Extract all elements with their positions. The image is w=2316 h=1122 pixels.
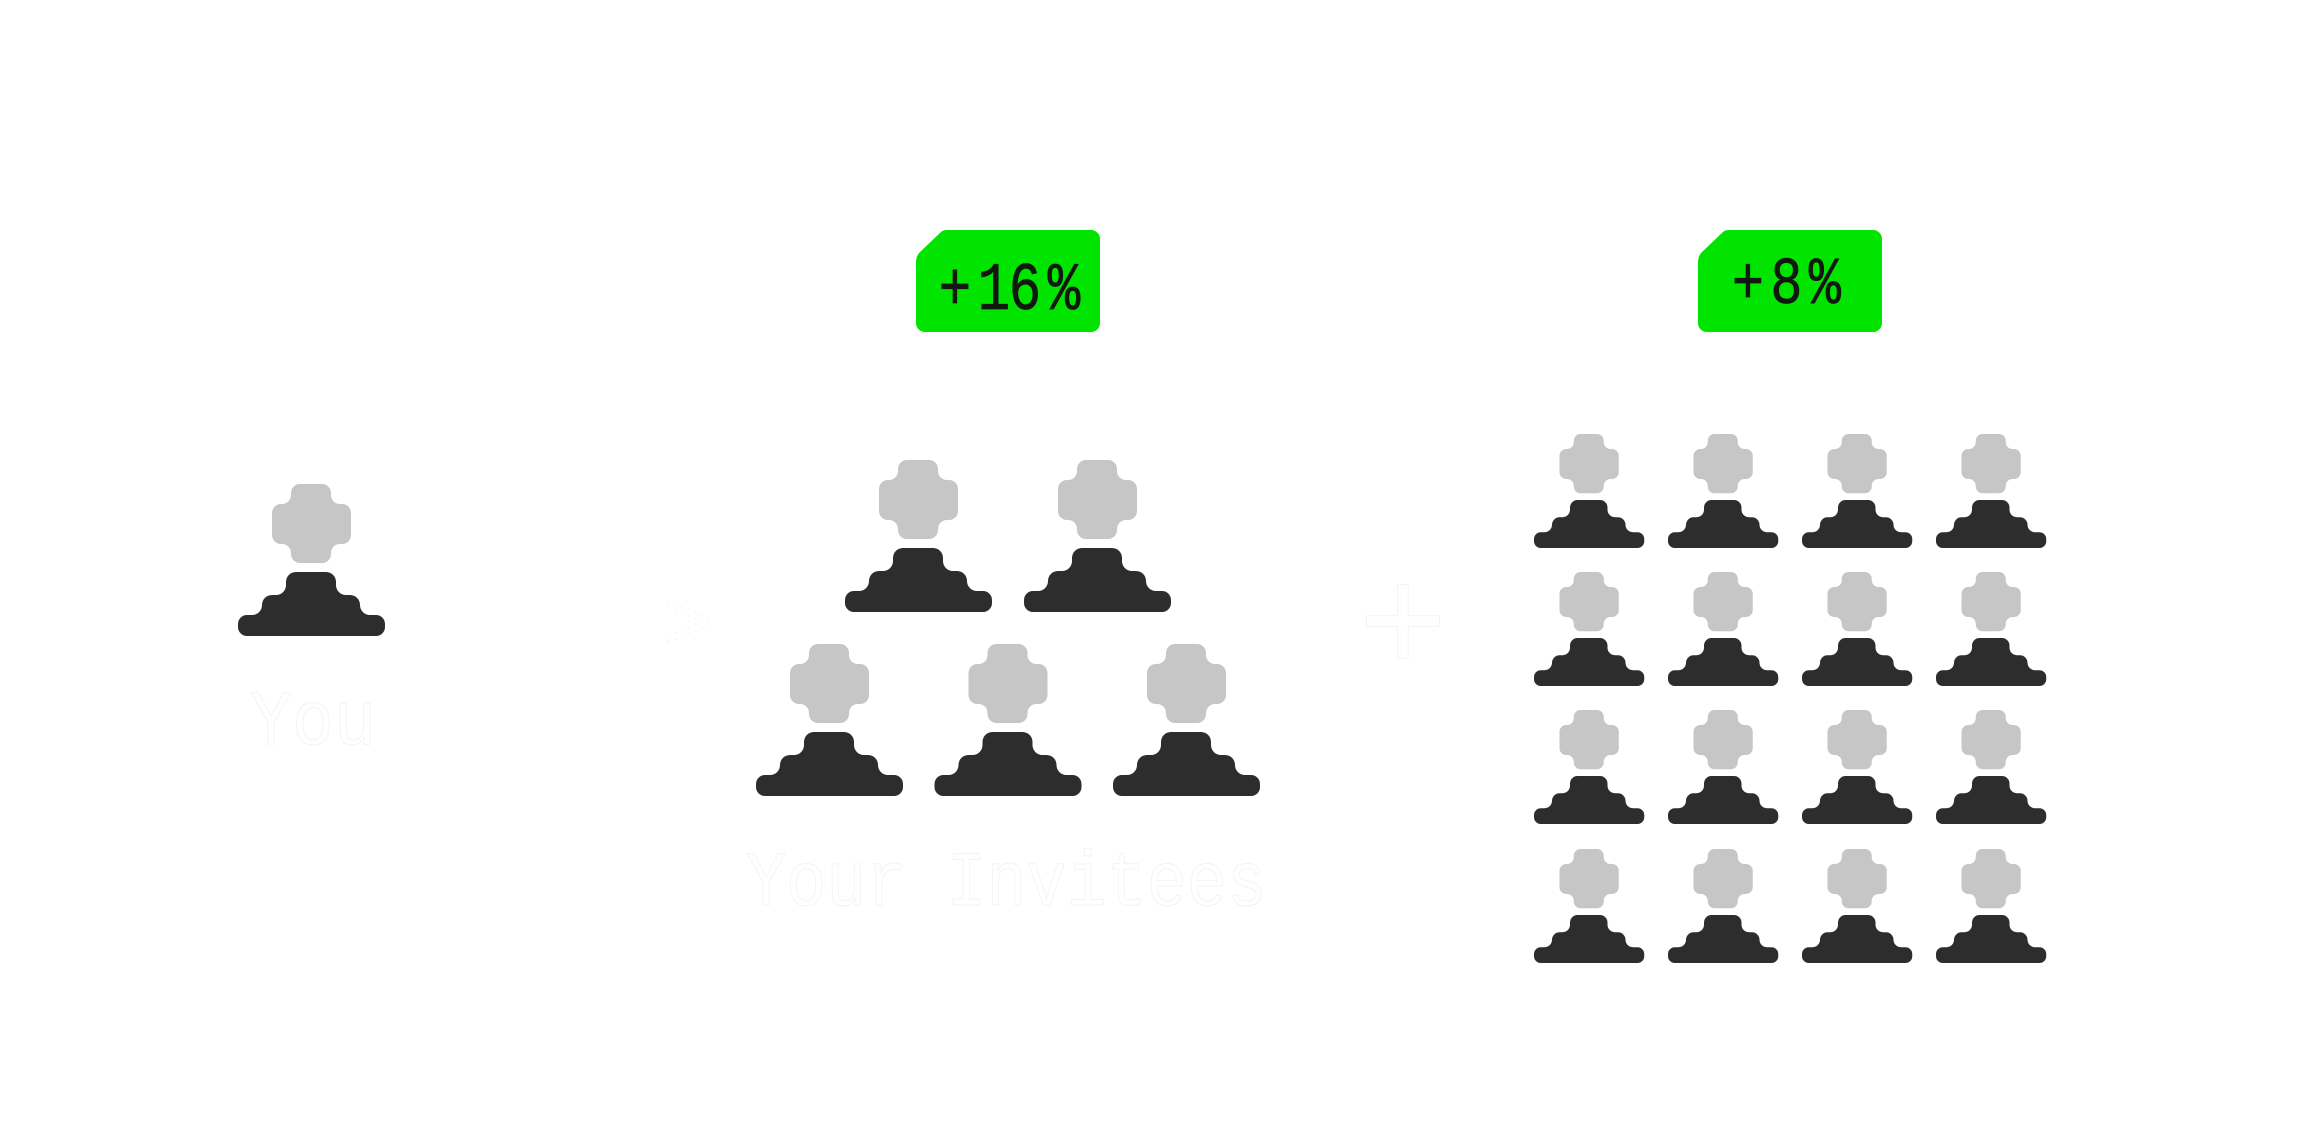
icon: person row 3 col 1 bbox=[1534, 710, 1644, 824]
badge: +8% bbox=[1698, 230, 1882, 332]
icon: person row 3 col 2 bbox=[1668, 710, 1778, 824]
icon: person row 2 col 2 bbox=[1668, 572, 1778, 686]
icon: invitee 2 bbox=[1024, 460, 1171, 612]
icon: invitee 5 bbox=[1113, 644, 1260, 796]
icon: person row 4 col 1 bbox=[1534, 849, 1644, 963]
icon: person row 1 col 1 bbox=[1534, 434, 1644, 548]
badge: +16%: +16% bbox=[939, 254, 1080, 330]
icon: person row 2 col 1 bbox=[1534, 572, 1644, 686]
icon: person row 3 col 3 bbox=[1802, 710, 1912, 824]
icon: person row 4 col 3 bbox=[1802, 849, 1912, 963]
label: You: You bbox=[250, 680, 376, 768]
panel: your invitees bbox=[746, 230, 1267, 929]
label: Your Invitees: Your Invitees bbox=[746, 841, 1267, 929]
icon: person row 4 col 2 bbox=[1668, 849, 1778, 963]
icon grid: 16 people bbox=[1534, 434, 2046, 963]
arrow: greater-than: > bbox=[664, 582, 712, 673]
icon: person row 2 col 4 bbox=[1936, 572, 2046, 686]
icon: person row 1 col 3 bbox=[1802, 434, 1912, 548]
icon: person row 1 col 4 bbox=[1936, 434, 2046, 548]
invitee icons bbox=[756, 460, 1260, 796]
panel: you bbox=[238, 484, 385, 768]
plus sign: + bbox=[1358, 547, 1448, 717]
icon: person row 4 col 4 bbox=[1936, 849, 2046, 963]
icon: invitee 3 bbox=[756, 644, 903, 796]
icon: invitee 4 bbox=[934, 644, 1082, 796]
icon: person row 1 col 2 bbox=[1668, 434, 1778, 548]
icon: person row 3 col 4 bbox=[1936, 710, 2046, 824]
badge: +8%: +8% bbox=[1732, 248, 1841, 324]
icon: invitee 1 bbox=[845, 460, 992, 612]
icon: you person bbox=[238, 484, 385, 636]
badge: +16% bbox=[916, 230, 1100, 332]
icon: person row 2 col 3 bbox=[1802, 572, 1912, 686]
panel: their invitees bbox=[1534, 230, 2046, 963]
